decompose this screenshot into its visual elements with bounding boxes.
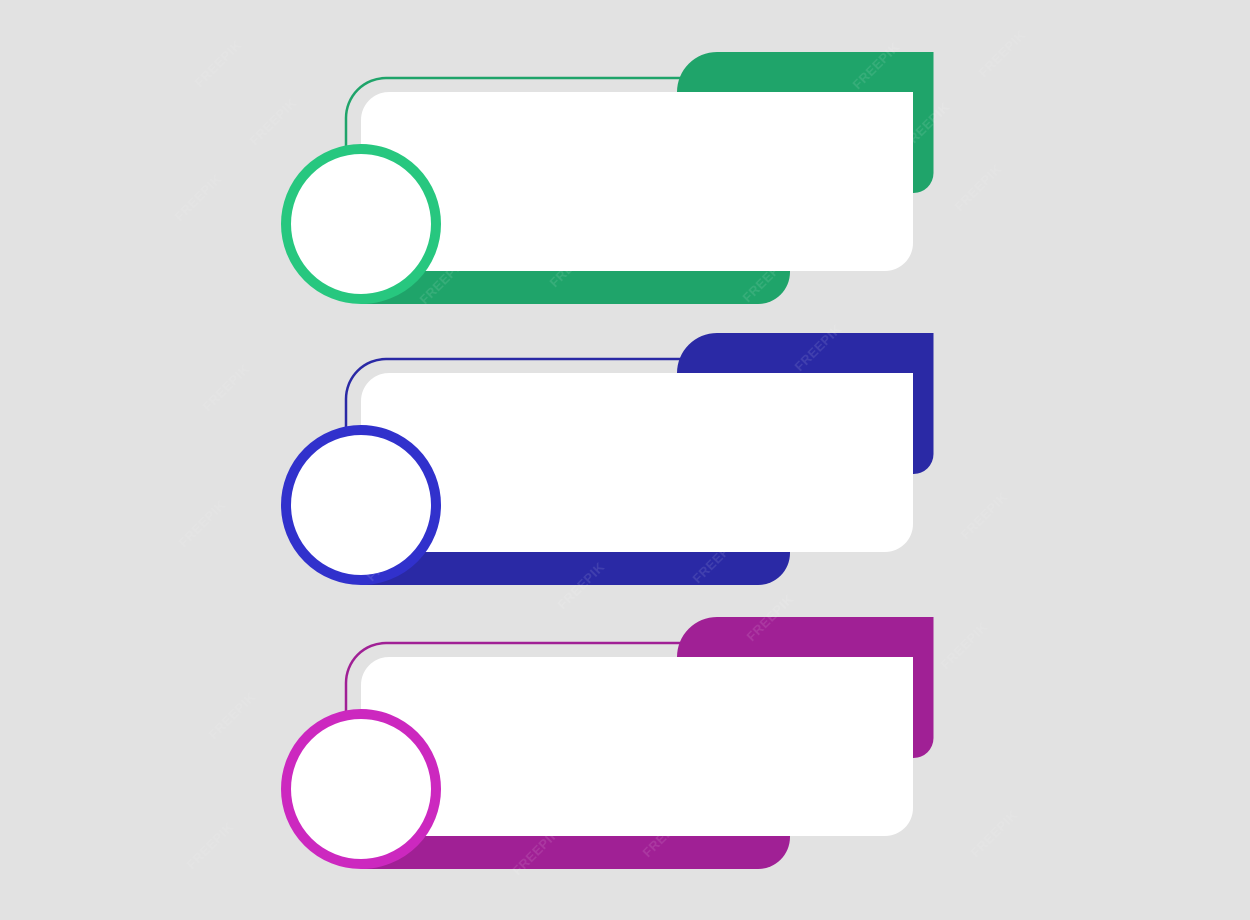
- watermarks: FREEPIK: [690, 533, 743, 586]
- purple top-right tab: [677, 617, 934, 758]
- green number circle: [286, 149, 436, 299]
- green outline connector: [346, 78, 690, 150]
- blue number circle: [286, 430, 436, 580]
- white card: [361, 373, 913, 552]
- watermarks: FREEPIK: [900, 99, 953, 152]
- watermarks: FREEPIK: [417, 254, 470, 307]
- watermarks: FREEPIK: [952, 161, 1005, 214]
- watermarks: FREEPIK: [200, 361, 253, 414]
- watermarks: FREEPIK: [547, 237, 600, 290]
- blue bottom bar: [361, 521, 790, 585]
- purple bottom bar: [361, 805, 790, 869]
- purple outline connector: [346, 643, 690, 715]
- watermarks: FREEPIK: [364, 531, 417, 584]
- green top-right tab: [677, 52, 934, 193]
- watermarks: FREEPIK: [247, 95, 300, 148]
- watermarks: FREEPIK: [640, 807, 693, 860]
- white card: [361, 92, 913, 271]
- white card: [361, 657, 913, 836]
- panel: green banner: [286, 52, 934, 304]
- watermarks: FREEPIK: [958, 489, 1011, 542]
- watermarks: FREEPIK: [206, 689, 259, 742]
- blue top-right tab: [677, 333, 934, 474]
- watermarks: FREEPIK: [192, 37, 245, 90]
- blue outline connector: [346, 359, 690, 431]
- panel: blue banner: [286, 333, 934, 585]
- watermarks: FREEPIK: [184, 819, 237, 872]
- watermarks: FREEPIK: [938, 619, 991, 672]
- watermarks: FREEPIK: [740, 252, 793, 305]
- watermarks: FREEPIK: [555, 559, 608, 612]
- watermarks: FREEPIK: [792, 321, 845, 374]
- watermarks: FREEPIK: [176, 497, 229, 550]
- green bottom bar: [361, 240, 790, 304]
- panel: purple banner: [286, 617, 934, 869]
- watermarks: FREEPIK: [976, 27, 1029, 80]
- watermarks: FREEPIK: [850, 39, 903, 92]
- watermarks: FREEPIK: [510, 825, 563, 878]
- watermarks: FREEPIK: [968, 807, 1021, 860]
- purple number circle: [286, 714, 436, 864]
- watermarks: FREEPIK: [744, 591, 797, 644]
- watermarks: FREEPIK: [172, 171, 225, 224]
- watermarks: [172, 27, 1029, 878]
